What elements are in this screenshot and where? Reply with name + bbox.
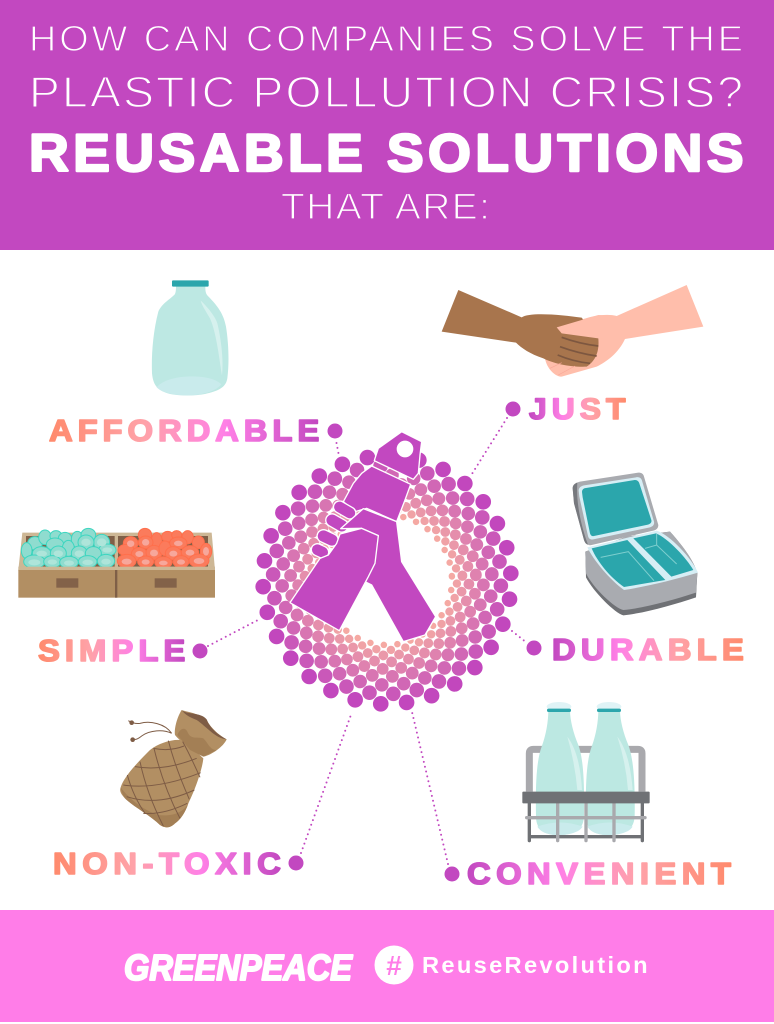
icon: mesh sack bbox=[120, 710, 227, 827]
icon: hash circle: # bbox=[386, 950, 402, 981]
heading line 4: THAT ARE: bbox=[281, 187, 490, 228]
heading line 1: HOW CAN COMPANIES SOLVE THE bbox=[29, 19, 743, 59]
icon: glass jar bbox=[152, 280, 228, 395]
icon: shaking hands bbox=[442, 285, 703, 377]
dotted connector lines bbox=[208, 418, 527, 864]
label: non-toxic: NON-TOXIC bbox=[53, 846, 281, 881]
logo: Greenpeace: GREENPEACE bbox=[124, 947, 353, 988]
icon: lunch box bbox=[573, 473, 698, 615]
central dot ring bbox=[256, 449, 518, 711]
heading bold line: REUSABLE SOLUTIONS bbox=[29, 124, 743, 183]
icon: crates of soap bbox=[18, 528, 215, 598]
heading line 2: PLASTIC POLLUTION CRISIS? bbox=[29, 67, 743, 117]
hashtag text: ReuseRevolution bbox=[422, 952, 648, 978]
label: just: JUST bbox=[529, 392, 626, 426]
icon: hash circle bbox=[374, 946, 414, 984]
footer panel bbox=[0, 910, 774, 1022]
label: simple: SIMPLE bbox=[38, 633, 185, 668]
icon: milk bottles in carrier bbox=[522, 702, 650, 841]
icon: hand holding spray bottle bbox=[290, 432, 436, 642]
label: affordable: AFFORDABLE bbox=[49, 413, 319, 448]
label: convenient: CONVENIENT bbox=[467, 856, 731, 891]
label: durable: DURABLE bbox=[552, 632, 744, 667]
header panel bbox=[0, 0, 774, 250]
